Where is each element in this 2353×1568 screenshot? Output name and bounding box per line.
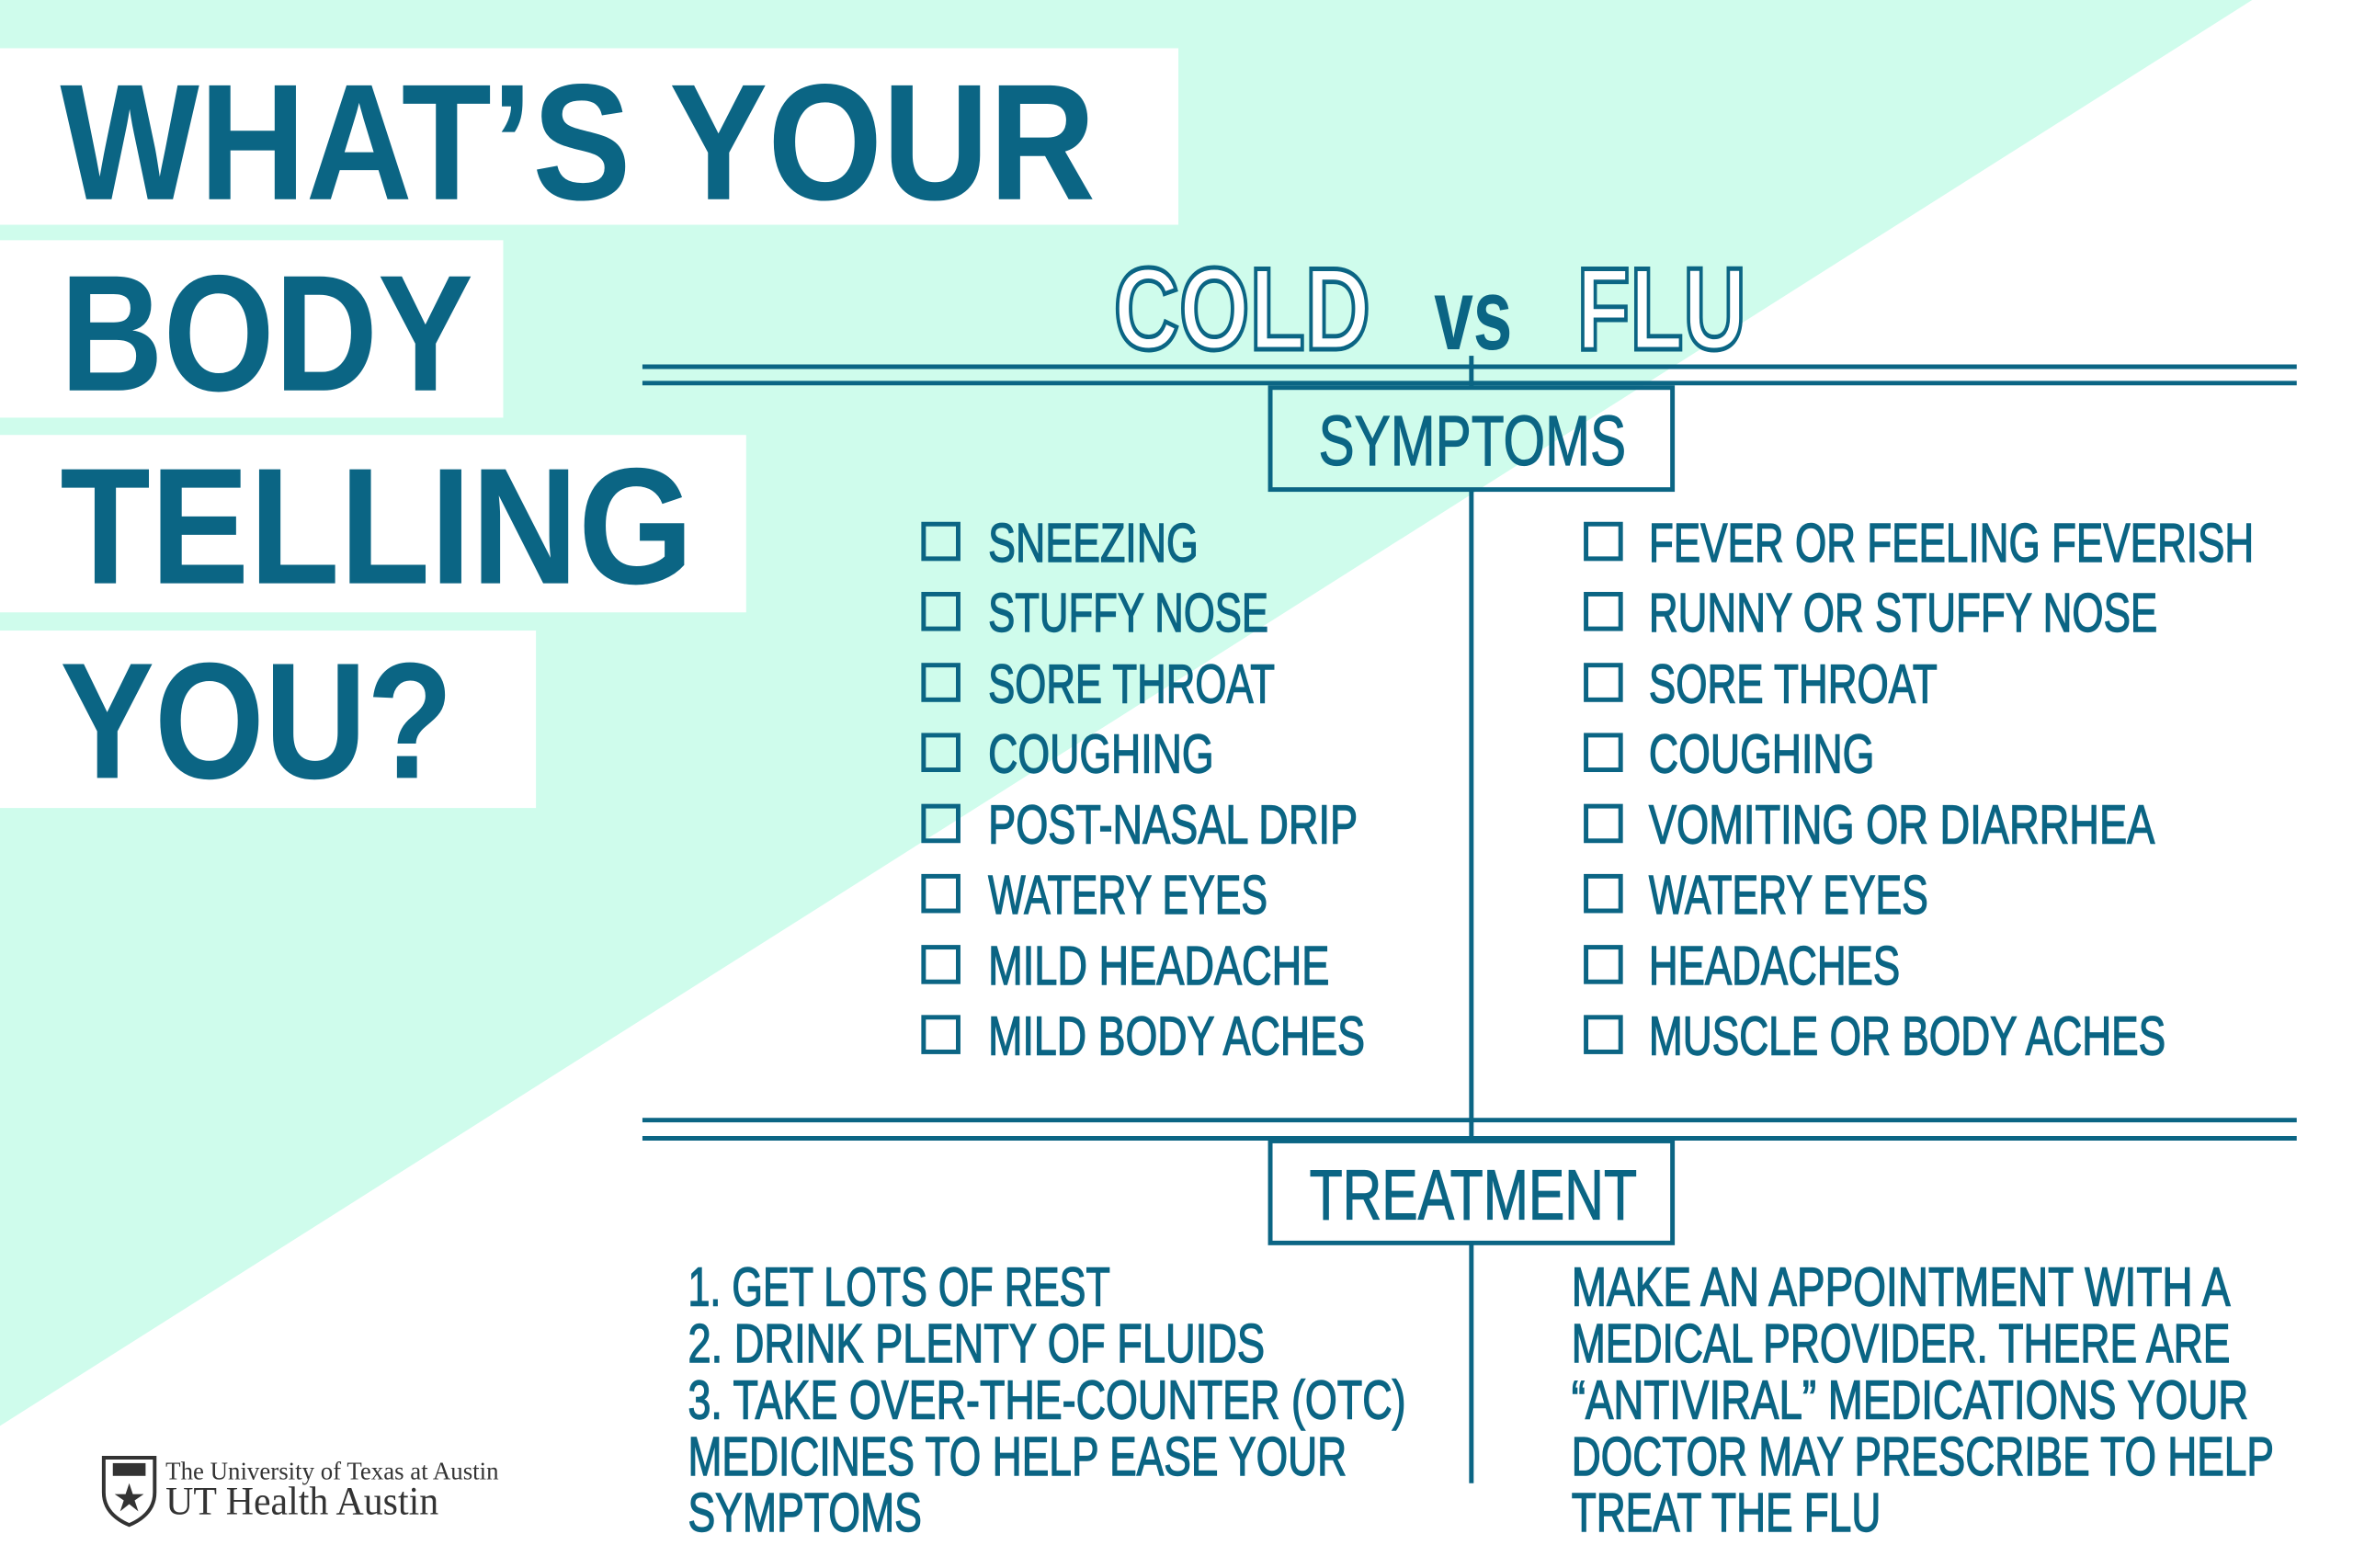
flu symptoms checklist: VOMITING OR DIARRHEA [1649, 794, 2155, 856]
title: BODY [60, 242, 473, 426]
cold symptoms checklist: SORE THROAT [988, 653, 1275, 714]
cold symptoms checklist: POST-NASAL DRIP [988, 794, 1358, 856]
cold treatment text: 2. DRINK PLENTY OF FLUIDS [688, 1312, 1265, 1374]
logo: UT Health Austin [104, 1457, 499, 1525]
cold treatment text [688, 1256, 1406, 1543]
logo: UT Health Austin: The University of Texas at Austin [165, 1457, 499, 1485]
flu symptoms checklist [1586, 512, 2254, 1066]
flu symptoms checklist: SORE THROAT [1649, 653, 1938, 714]
flu treatment text [1572, 1256, 2274, 1543]
cold symptoms checklist [924, 512, 1365, 1066]
cold treatment text: 1. GET LOTS OF REST [688, 1256, 1110, 1318]
heading: cold vs flu: FLU [1577, 244, 1746, 374]
cold symptoms checklist: STUFFY NOSE [988, 582, 1268, 643]
title: WHAT’S YOUR [60, 51, 1096, 235]
cold treatment text: MEDICINES TO HELP EASE YOUR [688, 1426, 1347, 1487]
title: TELLING [60, 435, 693, 619]
flu symptoms checklist: WATERY EYES [1649, 864, 1928, 926]
heading: cold vs flu [1114, 244, 1746, 374]
cold symptoms checklist: MILD BODY ACHES [988, 1005, 1365, 1066]
cold symptoms checklist: COUGHING [988, 723, 1214, 785]
heading: cold vs flu: COLD [1114, 244, 1370, 374]
heading: cold vs flu: vs [1434, 258, 1512, 371]
treatment header box: TREATMENT [1310, 1156, 1637, 1235]
cold symptoms checklist: WATERY EYES [988, 864, 1267, 926]
symptoms header box: SYMPTOMS [1319, 402, 1626, 481]
cold symptoms checklist: SNEEZING [988, 512, 1199, 574]
symptoms header box [1270, 388, 1673, 490]
cold symptoms checklist: MILD HEADACHE [988, 935, 1329, 996]
title: YOU? [60, 629, 453, 813]
cold treatment text: SYMPTOMS [688, 1482, 922, 1543]
title [0, 48, 1178, 813]
cold treatment text: 3. TAKE OVER-THE-COUNTER (OTC) [688, 1369, 1406, 1430]
flu symptoms checklist: RUNNY OR STUFFY NOSE [1649, 582, 2157, 643]
flu symptoms checklist: COUGHING [1649, 723, 1874, 785]
icon: shield [104, 1458, 154, 1525]
flu symptoms checklist: MUSCLE OR BODY ACHES [1649, 1005, 2165, 1066]
flu symptoms checklist: HEADACHES [1649, 935, 1900, 996]
logo: UT Health Austin: UT Health Austin [165, 1479, 438, 1523]
treatment header box [1270, 1141, 1673, 1243]
flu treatment text: TREAT THE FLU [1572, 1482, 1881, 1543]
